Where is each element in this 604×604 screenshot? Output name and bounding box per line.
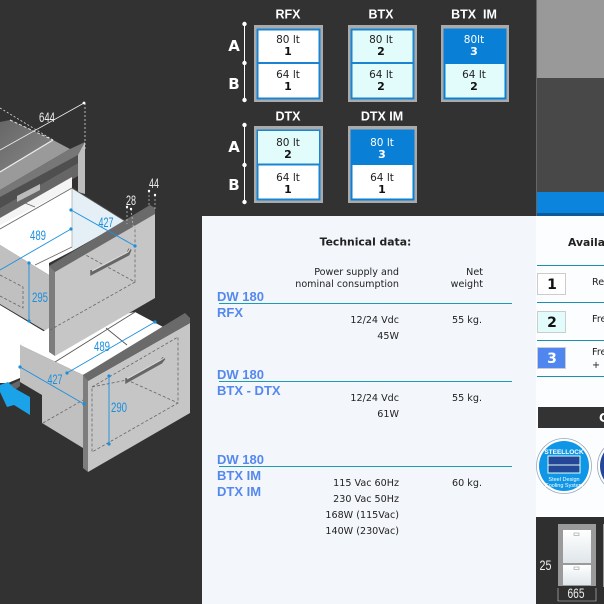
row: DW 180 BTX IM DTX IM: 168W (115Vac) [325,510,399,521]
panel: top right product image block [536,0,604,216]
dimension: upper 427 [69,208,137,248]
row: DW 180 BTX IM DTX IM: 230 Vac 50Hz [333,494,399,505]
panel: BTX IM configuration: 3 [470,45,478,58]
row: DW 180 BTX - DTX: 12/24 Vdc [350,393,399,404]
scale: A B row 2: A [228,138,240,156]
heading: RFX: RFX [276,8,301,22]
row: DW 180 BTX IM DTX IM: 115 Vac 60Hz [333,478,399,489]
dimension: upper 489: 489 [30,228,46,243]
panel: DTX IM configuration [348,126,417,203]
dimension: upper 427: 427 [98,215,114,230]
panel: DTX configuration: 1 [284,183,292,196]
panel: DTX IM configuration: 3 [378,148,386,161]
row: DW 180 RFX: 55 kg. [452,315,482,326]
icon: blue arrow [0,382,30,415]
icon: second badge [598,438,604,494]
row: DW 180 BTX - DTX: BTX - DTX [217,383,281,398]
heading bar [538,407,604,428]
legend item 1: Re [592,277,604,288]
illustration: exploded fridge with drawers [0,102,190,472]
column header: power supply: Power supply and [314,267,399,278]
scale: A B row 1: A [228,37,240,55]
scale: A B row 1 [228,22,247,102]
legend item 2 [538,312,604,332]
panel: BTX IM configuration: 64 lt [462,69,486,81]
dimension: lower 427 [18,365,86,406]
row: DW 180 BTX - DTX: 61W [377,409,400,420]
panel: DTX configuration [254,126,323,203]
panel: RFX configuration: 1 [284,45,292,58]
dimension: 290 [107,374,127,446]
legend item 1 [538,274,604,294]
row: DW 180 BTX IM DTX IM: BTX IM [217,468,261,483]
column header: power supply [295,267,399,290]
dimension: 44: 44 [149,176,159,191]
panel: RFX configuration [254,25,323,102]
panel: DTX IM configuration: 80 lt [370,137,394,149]
legend item 2: 2 [547,315,557,331]
panel: DTX configuration: 64 lt [276,172,300,184]
row: DW 180 BTX IM DTX IM: DW 180 [217,452,264,467]
row: DW 180 BTX IM DTX IM: 60 kg. [452,478,482,489]
dimension: 290: 290 [111,400,127,415]
legend item 3: + [592,360,600,371]
panel: BTX configuration: 80 lt [369,34,393,46]
panel: front dimensions: 665 [568,585,585,601]
row: DW 180 RFX: 45W [377,331,400,342]
dimension: lower 427: 427 [48,372,62,387]
lower drawer front [83,313,190,472]
panel: BTX configuration [348,25,417,102]
dimension: lower 489: 489 [94,339,110,354]
row: DW 180 BTX IM DTX IM: DTX IM [217,484,261,499]
panel: front dimensions [536,517,604,604]
scale: A B row 2 [228,123,247,204]
panel: RFX configuration: 64 lt [276,69,300,81]
dimension: lower 489 [65,320,157,375]
scale: A B row 1: B [228,75,240,93]
panel: RFX configuration: 1 [284,80,292,93]
heading: BTX IM: BTX IM [451,8,497,22]
panel: DTX IM configuration: 64 lt [370,172,394,184]
dimension: 28: 28 [126,193,136,208]
row: DW 180 BTX IM DTX IM: 140W (230Vac) [325,526,399,537]
column header: net weight [451,267,483,290]
row: DW 180 RFX: DW 180 [217,289,264,304]
column header: net weight: Net [466,267,483,278]
dimension: upper 489 [0,227,73,270]
upper drawer front [49,205,155,356]
dimension: 644 [0,102,85,150]
panel: front dimensions: 25 [540,557,552,573]
panel: DTX IM configuration: 1 [378,183,386,196]
panel: technical data [202,216,536,604]
row: DW 180 BTX - DTX [217,367,512,420]
heading: technical data: Technical data: [320,236,411,248]
panel: DTX configuration: 2 [284,148,292,161]
icon: steel lock badge [536,438,592,494]
heading: DTX: DTX [276,110,301,124]
column header: net weight: weight [451,279,483,290]
legend item 1: 1 [547,277,557,293]
dimension: 28 [126,193,136,240]
row: DW 180 BTX - DTX: 55 kg. [452,393,482,404]
lower drawer floor and side [0,298,168,448]
panel: BTX IM configuration [441,25,509,102]
row: DW 180 RFX: RFX [217,305,243,320]
panel: BTX configuration: 2 [377,80,385,93]
panel: BTX IM configuration: 80lt [464,34,484,46]
dimension: 44 [148,176,159,210]
panel: RFX configuration: 80 lt [276,34,300,46]
panel: BTX configuration: 64 lt [369,69,393,81]
panel: available versions [536,216,604,604]
panel: BTX configuration: 2 [377,45,385,58]
icon: steel lock badge: STEELLOCK [544,449,584,456]
panel: BTX IM configuration: 2 [470,80,478,93]
cabinet top [0,120,85,220]
scale: A B row 2: B [228,176,240,194]
heading: DTX IM: DTX IM [361,110,403,124]
icon: steel lock badge: Steel Design [548,477,580,483]
panel: DTX configuration: 80 lt [276,137,300,149]
row: DW 180 RFX [217,289,512,342]
dimension: 644: 644 [39,110,55,125]
legend item 3: 3 [547,351,557,367]
dimension: 295: 295 [32,290,48,305]
row: DW 180 RFX: 12/24 Vdc [350,315,399,326]
column header: power supply: nominal consumption [295,279,399,290]
dimension: 295 [27,261,48,323]
row: DW 180 BTX - DTX: DW 180 [217,367,264,382]
heading: BTX: BTX [368,8,394,22]
legend item 3 [538,347,604,371]
row: DW 180 BTX IM DTX IM [217,452,512,537]
upper drawer interior [0,177,125,333]
icon: steel lock badge: Cooling System [545,483,584,489]
